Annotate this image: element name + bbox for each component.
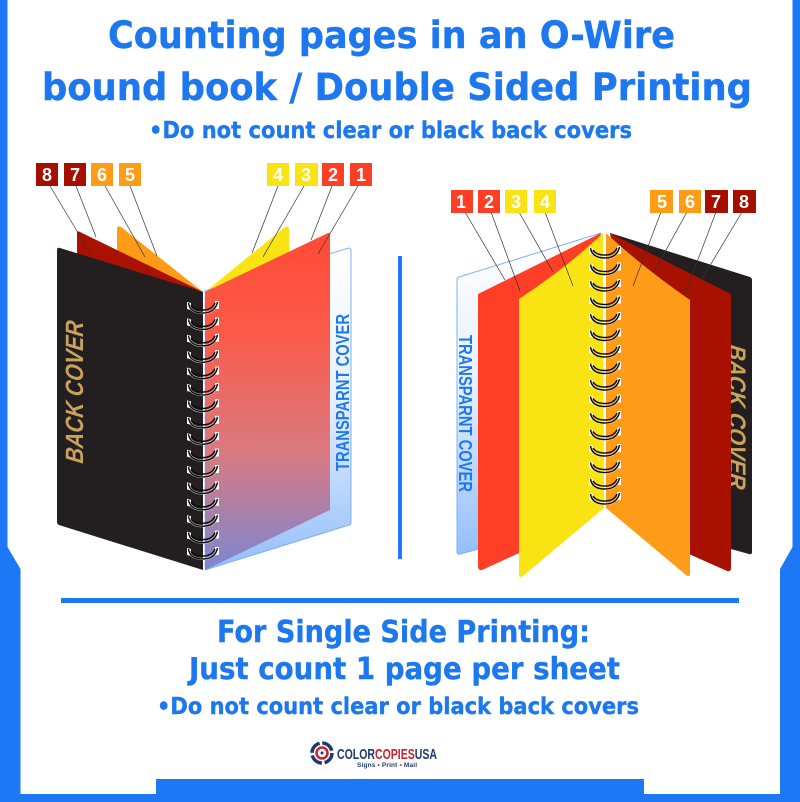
back cover right	[610, 233, 752, 554]
back cover	[57, 248, 203, 570]
left book number labels: 5	[125, 165, 135, 185]
right book leader lines	[465, 212, 742, 291]
page 5-6 orange right	[606, 233, 690, 576]
right book illustration	[455, 233, 752, 577]
left spiral binding	[187, 301, 219, 559]
single side note: •Do not count clear or black back covers	[157, 692, 639, 720]
transparent cover label right: TRANSPARNT COVER	[455, 335, 475, 492]
right book number labels: 5	[657, 192, 667, 212]
logo tagline: Signs • Print • Mail	[357, 762, 417, 769]
left book number labels: 3	[301, 165, 311, 185]
horizontal divider	[61, 598, 739, 603]
right book number labels: 4	[540, 192, 550, 212]
page 7-8 dark red right	[610, 233, 731, 571]
transparent cover label: TRANSPARNT COVER	[333, 314, 353, 471]
right book number labels: 8	[739, 192, 749, 212]
center divider	[398, 256, 402, 559]
single side printing heading	[187, 615, 620, 687]
transparent cover right	[457, 233, 601, 554]
title: Counting pages in an O-Wire	[108, 14, 675, 57]
left book number labels: 6	[97, 165, 107, 185]
logo mark	[312, 743, 332, 763]
right book number labels	[451, 190, 756, 213]
title: bound book / Double Sided Printing	[42, 66, 752, 109]
transparent cover	[205, 248, 351, 570]
right spine	[604, 235, 606, 507]
left book number labels	[36, 163, 372, 186]
right book number labels: 1	[456, 192, 466, 212]
single side printing heading: For Single Side Printing:	[217, 615, 590, 650]
page 1-2 red right	[478, 233, 601, 570]
left spine	[203, 293, 205, 570]
back cover label right: BACK COVER	[723, 343, 750, 491]
title	[42, 14, 752, 109]
right spiral binding	[589, 246, 621, 504]
page 5-6 orange	[117, 226, 203, 292]
left book leader lines	[50, 186, 358, 257]
page 3-4 yellow right	[519, 233, 604, 577]
left book number labels: 2	[328, 165, 338, 185]
page 7-8 dark red	[77, 231, 203, 292]
left book number labels: 7	[70, 165, 80, 185]
logo	[312, 743, 437, 769]
right book number labels: 6	[685, 192, 695, 212]
single side printing heading: Just count 1 page per sheet	[187, 652, 620, 687]
back cover label: BACK COVER	[61, 319, 89, 465]
right book number labels: 7	[711, 192, 721, 212]
subtitle note: •Do not count clear or black back covers	[149, 116, 632, 144]
left book number labels: 4	[273, 165, 283, 185]
right book number labels: 2	[484, 192, 494, 212]
left book illustration	[57, 226, 353, 570]
logo name: COLORCOPIESUSA	[337, 746, 437, 763]
page 3-4 yellow	[205, 226, 289, 292]
page 1-2 red	[205, 233, 330, 570]
left book number labels: 8	[42, 165, 52, 185]
left book number labels: 1	[356, 165, 366, 185]
right book number labels: 3	[511, 192, 521, 212]
